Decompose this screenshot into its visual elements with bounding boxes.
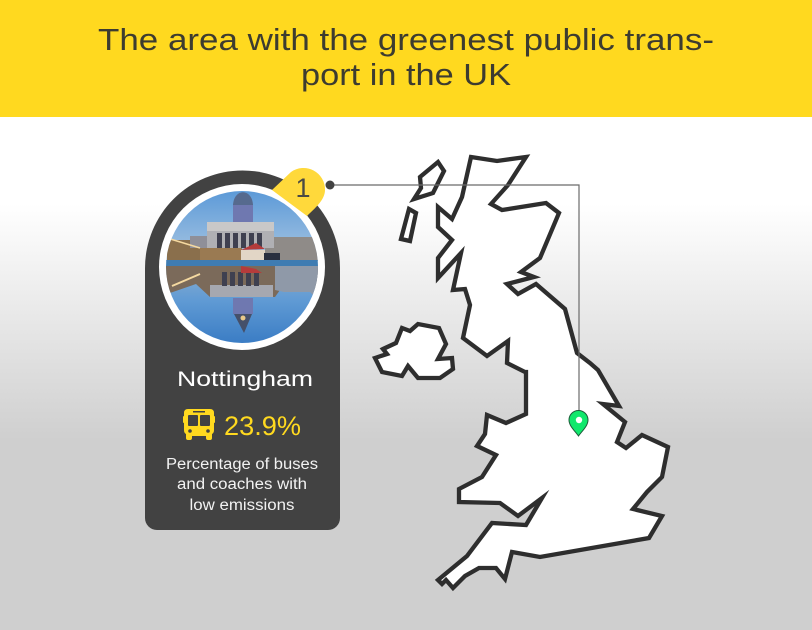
- title: [98, 22, 714, 92]
- title: The area with the greenest public trans-: [98, 22, 714, 57]
- header banner: [0, 0, 812, 117]
- connector line: [330, 185, 579, 415]
- stat: percentage: 23.9%: [224, 411, 301, 441]
- photo: Nottingham Council House: [159, 184, 325, 350]
- map: Isle of Skye: [414, 162, 444, 199]
- title: port in the UK: [301, 57, 511, 92]
- badge: rank 1: 1: [295, 173, 311, 203]
- map: Great Britain: [438, 157, 668, 588]
- description: low emissions: [190, 497, 295, 514]
- badge: rank 1: [272, 168, 325, 216]
- city name: Nottingham: [177, 368, 313, 391]
- description: and coaches with: [177, 476, 307, 493]
- map: Northern Ireland: [375, 324, 453, 378]
- panel: Nottingham card: [145, 168, 340, 530]
- description: Percentage of buses: [166, 456, 318, 473]
- dot: connector start: [326, 180, 334, 190]
- icon: bus: [183, 409, 215, 440]
- UK map: [375, 157, 668, 588]
- map: Outer Hebrides: [401, 209, 416, 241]
- icon: map pin: [569, 410, 588, 436]
- description: [166, 456, 318, 514]
